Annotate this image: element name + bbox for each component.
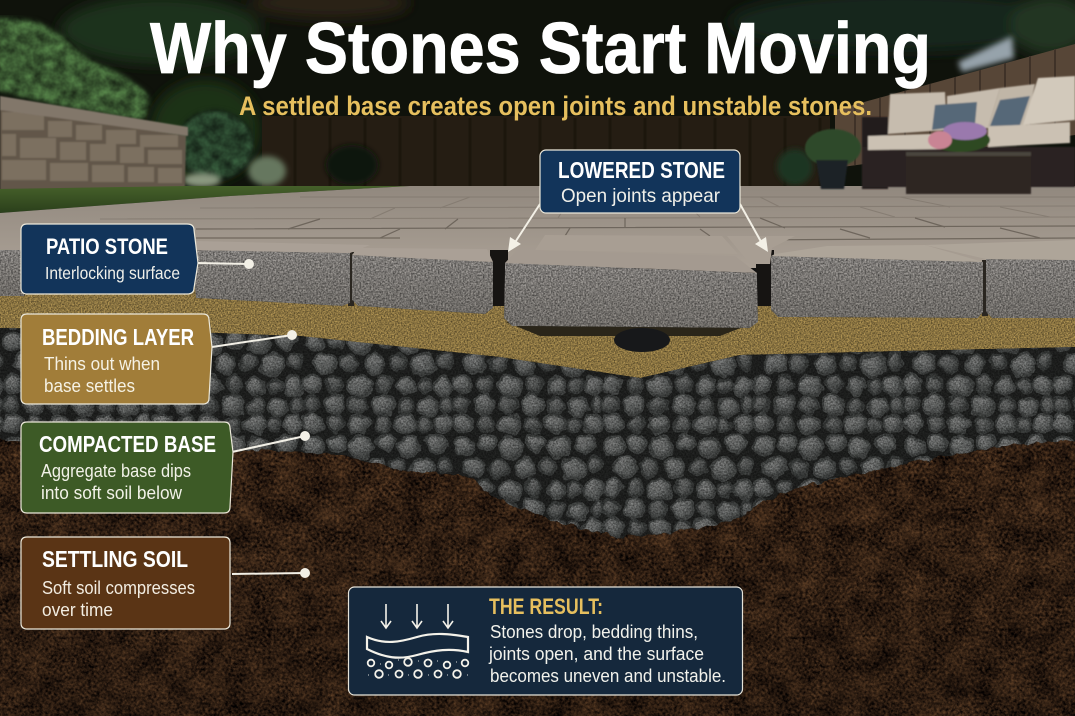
patio surface with joints <box>0 186 1075 268</box>
stone: right <box>771 245 983 318</box>
lawn <box>0 186 410 213</box>
label: lowered stone: LOWERED STONE <box>558 157 725 183</box>
stones: behind lowered stone <box>535 235 795 264</box>
subtitle: A settled base creates open joints and unstable stones. <box>239 91 872 121</box>
leader: patio stone <box>197 259 254 269</box>
label: settling soil <box>21 537 230 629</box>
label: settling soil: Soft soil compresses <box>42 578 195 598</box>
patio stones row <box>0 235 1075 352</box>
soil layer <box>0 400 1075 716</box>
result callout <box>348 587 742 695</box>
result callout: THE RESULT: <box>489 594 603 619</box>
label: settling soil: over time <box>42 600 113 620</box>
label: settling soil: SETTLING SOIL <box>42 546 188 572</box>
label: compacted base: into soft soil below <box>41 483 183 503</box>
result callout: Stones drop, bedding thins, <box>490 621 698 642</box>
stone: far left <box>0 250 24 296</box>
lowered stone <box>504 250 758 352</box>
label: compacted base: COMPACTED BASE <box>39 431 216 457</box>
stone: far right <box>925 240 1075 318</box>
label: patio stone: PATIO STONE <box>46 234 168 259</box>
label: compacted base: Aggregate base dips <box>41 461 191 481</box>
background: garden scene <box>0 0 1075 213</box>
leader: compacted base <box>232 431 310 452</box>
arrow: left joint <box>508 204 540 252</box>
label: patio stone <box>21 224 198 294</box>
label: bedding layer: base settles <box>44 376 135 396</box>
stone: centre left <box>352 248 493 314</box>
result callout: becomes uneven and unstable. <box>490 665 726 686</box>
label: bedding layer: BEDDING LAYER <box>42 324 194 350</box>
patio furniture <box>805 76 1075 194</box>
label: bedding layer <box>21 314 212 404</box>
compacted gravel base <box>0 315 1075 537</box>
label: compacted base <box>21 422 233 513</box>
retaining wall <box>0 96 188 190</box>
title: Why Stones Start Moving <box>150 9 931 89</box>
label: lowered stone: Open joints appear <box>561 185 720 207</box>
icon: settling layers with arrows <box>367 604 468 678</box>
garden shrubs <box>0 15 255 181</box>
leader: bedding layer <box>212 330 297 347</box>
arrow: right joint <box>740 204 768 252</box>
label: patio stone: Interlocking surface <box>45 263 180 283</box>
leader: settling soil <box>232 568 310 578</box>
dark joints <box>348 250 988 316</box>
stone: left <box>191 241 370 306</box>
label: lowered stone <box>540 150 740 213</box>
result callout: joints open, and the surface <box>488 643 704 664</box>
bedding sand layer <box>0 284 1075 378</box>
label: bedding layer: Thins out when <box>44 354 160 374</box>
